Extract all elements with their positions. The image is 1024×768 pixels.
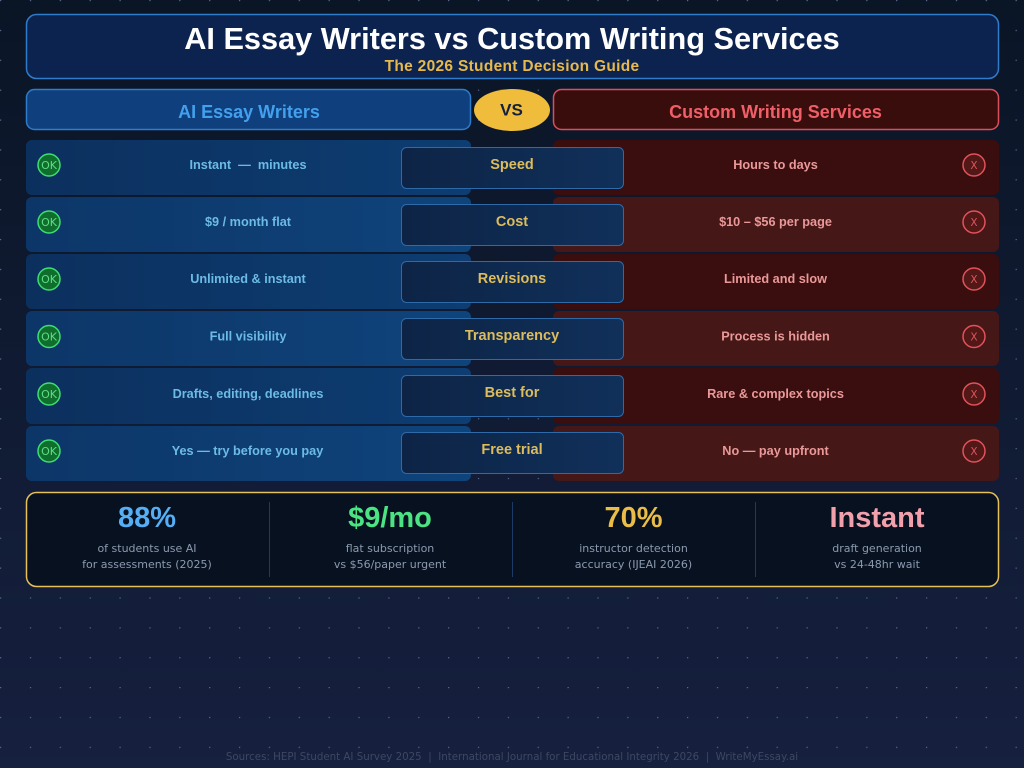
stat: Instant [829,502,925,571]
title banner [26,14,998,78]
stat: $9/mo: flat subscription [346,542,434,555]
comparison row: Revisions: OK [41,273,58,286]
comparison row: Cost: $10 – $56 per page [719,215,832,229]
stat: 88% [82,502,212,571]
column header: AI Essay Writers: AI Essay Writers [178,102,320,122]
comparison row: Transparency: Full visibility [210,330,286,344]
comparison row: Best for: Best for [485,385,540,401]
stats panel [26,492,998,586]
comparison row: Speed: Instant — minutes [189,158,307,172]
stat: Instant: vs 24-48hr wait [834,558,921,571]
stat: 88%: 88% [118,502,176,534]
column header: Custom Writing Services [554,90,998,130]
VS badge: VS [500,100,523,120]
comparison row: Cost [26,197,999,252]
comparison row: Best for: X [970,389,978,401]
comparison row: Revisions: Revisions [478,271,546,287]
comparison row: Speed: OK [41,159,58,172]
stat: $9/mo: $9/mo [348,502,432,534]
stat: 70%: 70% [604,502,663,534]
comparison row: Free trial: No — pay upfront [722,444,829,458]
comparison row: Transparency [26,311,999,366]
VS badge [474,89,550,131]
comparison row: Revisions: X [970,274,978,286]
footer sources: Sources: HEPI Student AI Survey 2025 | International Journal for Educational Integrity 2026 | WriteMyEssay.ai [226,751,798,763]
comparison row: Free trial: OK [41,445,58,458]
stat: Instant: draft generation [832,542,922,555]
comparison row: Cost: X [970,217,978,229]
title: AI Essay Writers vs Custom Writing Services [184,21,840,56]
comparison row: Free trial [26,426,999,481]
comparison row: Cost: OK [41,216,58,229]
comparison row: Transparency: Transparency [465,328,559,344]
stat: $9/mo: vs $56/paper urgent [334,558,447,571]
stat: 70%: instructor detection [579,542,688,555]
comparison row: Transparency: OK [41,330,58,344]
comparison row: Free trial: Yes — try before you pay [172,444,323,458]
comparison row: Speed [26,140,999,195]
comparison row: Speed: Hours to days [733,158,818,172]
comparison row: Speed: Speed [490,157,534,173]
stat: 70%: accuracy (IJEAI 2026) [575,558,692,571]
stat: Instant: Instant [829,502,925,534]
comparison row: Cost: $9 / month flat [205,215,292,229]
comparison row: Free trial: Free trial [481,442,543,458]
comparison row: Transparency: Process is hidden [721,330,830,344]
comparison row: Revisions: Limited and slow [724,272,827,286]
column header: Custom Writing Services: Custom Writing Services [669,102,882,122]
comparison row: Cost: Cost [496,214,528,230]
comparison row: Revisions [26,254,999,309]
comparison row: Transparency: X [970,332,978,344]
comparison row: Best for: Drafts, editing, deadlines [173,387,323,401]
comparison row: Best for: OK [41,388,58,401]
subtitle: The 2026 Student Decision Guide [385,58,639,75]
column header: AI Essay Writers [26,90,470,130]
comparison row: Revisions: Unlimited & instant [190,272,307,286]
comparison row: Free trial: X [970,446,978,458]
stat: $9/mo [334,502,447,571]
comparison row: Speed: X [970,160,978,172]
comparison row: Best for: Rare & complex topics [707,387,844,401]
comparison row: Best for [26,368,999,424]
stat: 70% [575,502,692,571]
stat: 88%: for assessments (2025) [82,558,212,571]
stat: 88%: of students use AI [97,542,197,555]
